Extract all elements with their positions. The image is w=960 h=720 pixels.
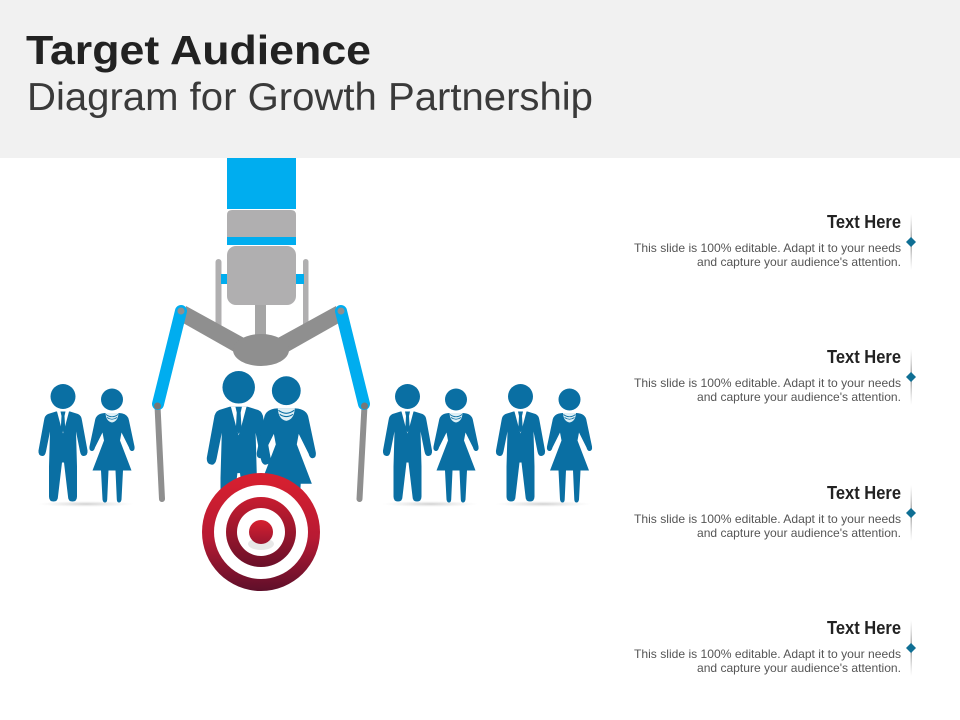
text item 1	[634, 212, 916, 270]
central couple	[207, 371, 316, 526]
text item 3: Text Here	[827, 483, 901, 503]
title: Target Audience	[26, 27, 371, 73]
text item 2	[634, 347, 916, 405]
text item 4: Text Here	[827, 618, 901, 638]
target	[202, 473, 320, 591]
text item 4	[634, 618, 916, 676]
text item 2: This slide is 100% editable. Adapt it to your needs	[634, 376, 901, 390]
people group 1	[38, 384, 135, 507]
text item 1: This slide is 100% editable. Adapt it to your needs	[634, 241, 901, 255]
text item 3: This slide is 100% editable. Adapt it to your needs	[634, 512, 901, 526]
text item 3	[634, 483, 916, 541]
text item 2: Text Here	[827, 347, 901, 367]
text item 1: Text Here	[827, 212, 901, 232]
people group 3	[382, 384, 479, 507]
text item 4: and capture your audience's attention.	[697, 661, 901, 675]
people group 4	[495, 384, 592, 507]
text item 1: and capture your audience's attention.	[697, 255, 901, 269]
text item 3: and capture your audience's attention.	[697, 526, 901, 540]
robotic claw	[154, 158, 368, 499]
header band	[0, 0, 960, 158]
text item 4: This slide is 100% editable. Adapt it to your needs	[634, 647, 901, 661]
text item 2: and capture your audience's attention.	[697, 390, 901, 404]
subtitle: Diagram for Growth Partnership	[27, 76, 593, 119]
